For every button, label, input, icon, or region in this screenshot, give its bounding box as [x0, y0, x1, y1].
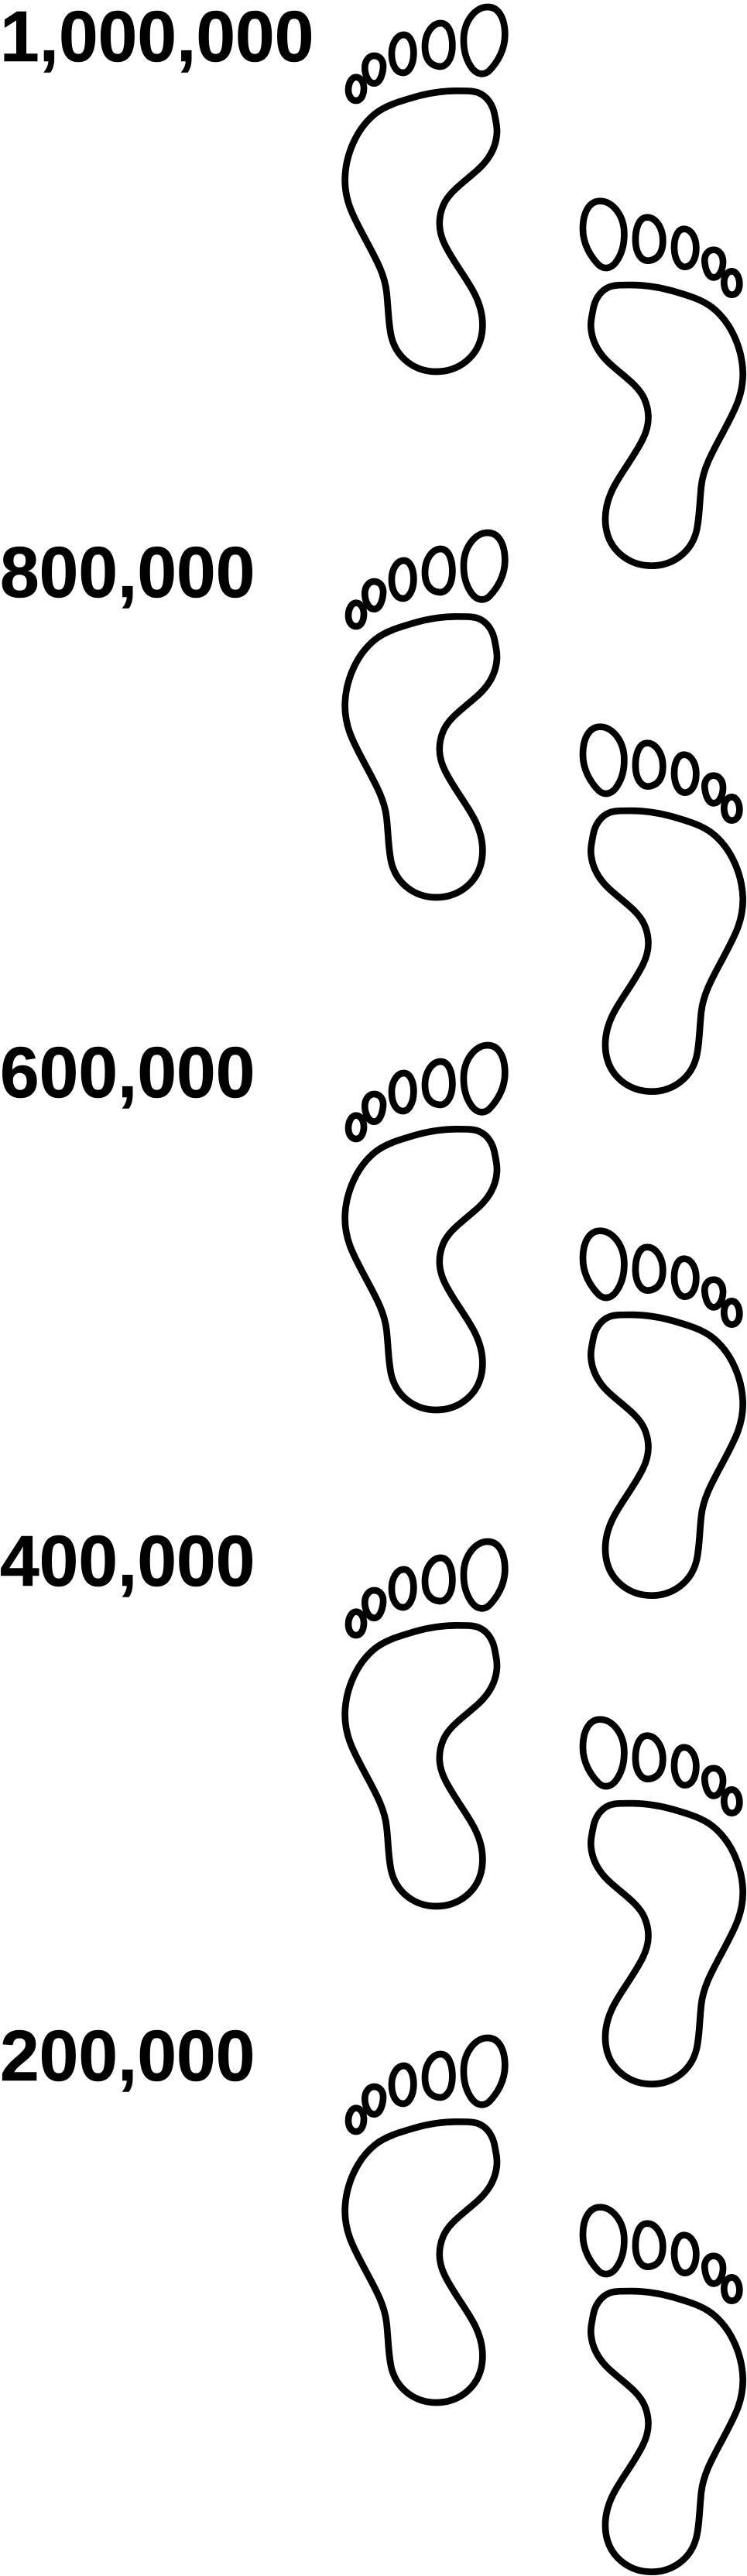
icon: left footprint 3 — [345, 1045, 505, 1410]
icon: left footprint 5 — [345, 2038, 505, 2403]
icon: left footprint 2 — [345, 533, 505, 897]
icon: left footprint 4 — [345, 1542, 505, 1906]
label: 800,000: 800,000 — [0, 532, 255, 612]
icon: right footprint 1 — [583, 201, 743, 566]
icon: right footprint 2 — [583, 727, 743, 1092]
icon: right footprint 5 — [583, 2207, 743, 2572]
label: 600,000: 600,000 — [0, 1032, 255, 1113]
icon: right footprint 3 — [583, 1231, 743, 1596]
label: 400,000: 400,000 — [0, 1521, 255, 1601]
icon: right footprint 4 — [583, 1720, 743, 2084]
icon: left footprint 1 — [345, 7, 505, 372]
label: 200,000: 200,000 — [0, 2015, 255, 2096]
